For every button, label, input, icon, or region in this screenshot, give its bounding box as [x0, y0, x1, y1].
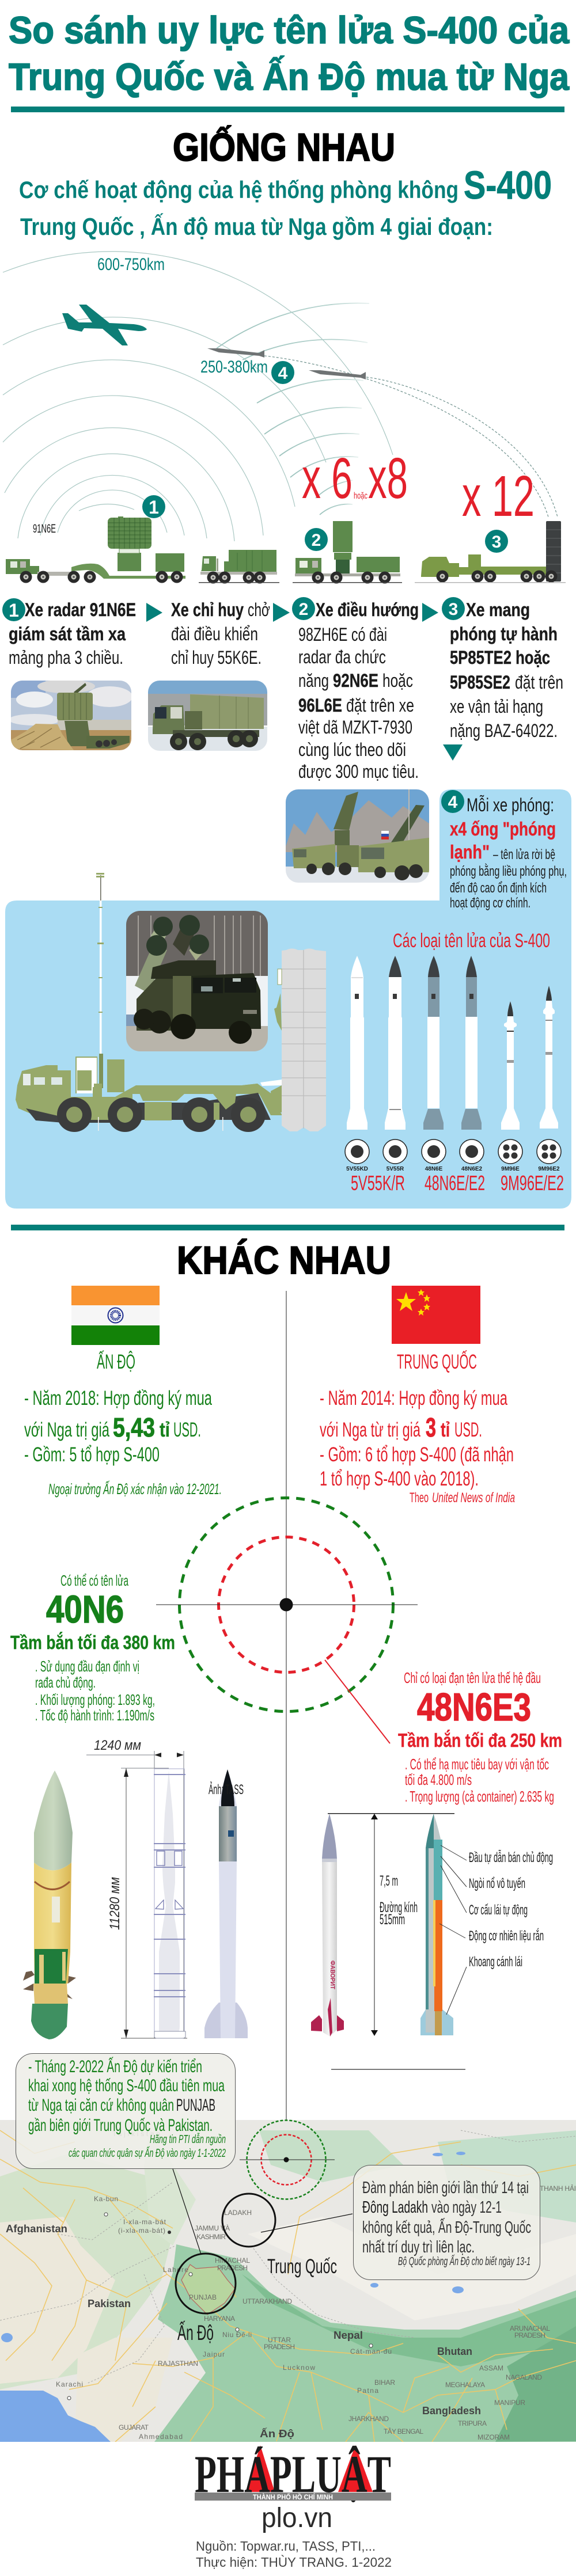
map: ARUNACHAL [510, 2324, 550, 2332]
arrow 1 [146, 603, 162, 622]
text block: India contract: tỉ [160, 1419, 170, 1441]
vehicle: guidance radar [293, 521, 402, 584]
cutaway labels: Khoang cánh lái [469, 1954, 522, 1970]
icon: missile 2 [309, 370, 366, 379]
photo: radar [9, 679, 132, 750]
flag: China [392, 1286, 480, 1344]
step 4 text: cold launch: 4 [448, 793, 458, 812]
map: Tajikistan [112, 2130, 160, 2138]
map: Bhutan [437, 2346, 472, 2357]
label: 7,5 m [380, 1873, 418, 1928]
callout: India deployment: - Tháng 2-2022 Ấn Độ dự kiến triển [28, 2057, 202, 2076]
missile height rule [328, 1813, 454, 2036]
step 4 text: launcher vehicle: xe vận tải hạng [450, 696, 543, 717]
missile cross-sections: 48N6E2 [461, 1166, 483, 1172]
map: Bangladesh [422, 2405, 481, 2417]
map: THANH HẢI [540, 2184, 576, 2193]
text block: India contract: 5,43 [113, 1412, 155, 1442]
step 3 text: guidance vehicle: radar đa chức [298, 647, 386, 667]
step 3 text: guidance vehicle: hoặc [382, 670, 413, 691]
missile: 9M96E [501, 1001, 520, 1130]
step 3 text: guidance vehicle: 2 [299, 600, 308, 619]
step 1 text: Xe radar 91N6E [25, 599, 136, 620]
step 2 text: command vehicle: Xe chỉ huy [171, 599, 244, 620]
map: PUNJAB [189, 2293, 217, 2301]
step 2 text: command vehicle: chở [248, 599, 270, 620]
icon: missile 1 [207, 348, 264, 358]
map: MEGHALAYA [445, 2381, 485, 2389]
step 3 text: guidance vehicle: 96L6E [298, 695, 342, 716]
map: JAMMU VÀ [195, 2224, 230, 2232]
text block: India contract: - Năm 2018: Hợp đồng ký mua [24, 1387, 212, 1409]
logo: Pháp Luật [195, 2445, 391, 2503]
step 3 text: guidance vehicle: đặt trên xe [346, 695, 414, 716]
badge 4: 4 [278, 364, 288, 383]
map: PRADESH [217, 2264, 248, 2272]
callout: India deployment: từ Nga tại căn cứ không quân [28, 2096, 174, 2115]
callout: border talks [354, 2165, 540, 2280]
missile cross-sections: 9M96E2 [538, 1166, 560, 1172]
photo: S-400 launcher truck [126, 911, 268, 1051]
caption: TASS: Ảnh: TASS [209, 1781, 244, 1798]
map: UTTARAKHAND [242, 2297, 292, 2305]
vehicle: command truck [199, 550, 279, 584]
dimension drawing: 1240 мм [94, 1738, 141, 1753]
missile group labels: 5V55K/R [351, 1171, 405, 1195]
badge 1 top [142, 495, 165, 518]
title [9, 9, 570, 98]
map: Lucknow [283, 2364, 315, 2372]
text block: India contract: Ngoại trưởng Ấn Độ xác nhận vào 12-2021. [48, 1480, 222, 1498]
text block: India contract: USD. [173, 1419, 201, 1441]
step 1 text: mảng pha 3 chiều. [9, 647, 123, 668]
text block: India contract [24, 1387, 222, 1498]
step 1 text [2, 598, 136, 668]
callout: border talks: Đông Ladakh [362, 2198, 428, 2217]
step 4 text: cold launch: lạnh" [450, 841, 490, 863]
map: RAJASTHAN [158, 2360, 198, 2368]
badge 1 top: 1 [149, 497, 159, 518]
map: TÂY BENGAL [384, 2427, 423, 2436]
step 2 text: command vehicle [171, 599, 270, 668]
missile: 40N6 photo [23, 1770, 76, 2039]
antenna mast [96, 873, 104, 1062]
missile: left render [311, 1814, 344, 2037]
callout: border talks: vào ngày 12-1 [431, 2198, 502, 2217]
step 1 text: giám sát tầm xa [9, 624, 126, 644]
subheading: mechanism: Cơ chế hoạt động của hệ thống phòng không [19, 176, 458, 203]
map: TRIPURA [458, 2419, 487, 2427]
badge 4 [271, 361, 294, 384]
map: Lahore [163, 2266, 188, 2274]
launcher truck illustration [16, 1054, 282, 1132]
map: Jaipur [203, 2350, 225, 2358]
step 4 text: launcher vehicle: Xe mang [466, 599, 530, 620]
callout: India deployment: các quan chức quân sự Ấn Độ vào ngày 1-1-2022 [69, 2146, 226, 2160]
step 4 text: launcher vehicle: 5P85TE2 hoặc [450, 647, 550, 668]
map: PRADESH [514, 2331, 545, 2339]
callout: India deployment: PUNJAB [176, 2096, 215, 2115]
map: PRADESH [264, 2343, 295, 2351]
missile cross-sections: 9M96E [501, 1166, 520, 1172]
missile: 9M96E2 [540, 986, 558, 1129]
dimension drawing: 11280 мм [107, 1877, 123, 1930]
text block: 40N6: . Tốc độ hành trình: 1.190m/s [35, 1707, 154, 1724]
badge 2 top: 2 [312, 531, 321, 550]
missile: cutaway [420, 1814, 453, 2035]
label: x 6 hoặc x8: hoặc [354, 491, 367, 501]
missile group labels: 48N6E/E2 [425, 1171, 485, 1195]
map: JHARKHAND [348, 2415, 389, 2423]
vehicle: radar 91N6E [6, 516, 185, 583]
radar arcs diagram [3, 252, 558, 541]
credits: Nguồn: Topwar.ru, TASS, PTI,... [196, 2539, 376, 2554]
logo url: plo.vn [262, 2503, 332, 2533]
heading: giống nhau: GIỐNG NHAU [173, 125, 395, 169]
text block: China contract: Theo [410, 1490, 429, 1506]
text block: 40N6: 40N6 [46, 1588, 124, 1631]
step 3 text: guidance vehicle: được 300 mục tiêu. [298, 761, 419, 782]
map: LADAKH [224, 2209, 252, 2217]
text block: 48N6E3: tối đa 4.800 m/s [405, 1771, 472, 1788]
map: Ahmedabad [139, 2433, 183, 2441]
missile cross-sections: 5V55R [386, 1166, 404, 1172]
text block: 48N6E3 [398, 1669, 562, 1805]
vehicle: launcher [415, 521, 566, 583]
photo: command truck [148, 681, 267, 751]
leader lines [439, 1845, 467, 2015]
map: GUJARAT [119, 2423, 149, 2431]
text block: 40N6: . Sử dụng đầu đạn định vị [35, 1658, 139, 1675]
arrow 3 [422, 603, 438, 622]
text block: 40N6: Có thể có tên lửa [60, 1572, 128, 1589]
step 2 text: command vehicle: đài điều khiển [171, 624, 258, 644]
label: x 6 hoặc x8: x 6 [302, 446, 353, 511]
map: I-xla-ma-bát [123, 2218, 166, 2226]
logo: Pháp Luật: THÀNH PHỐ HỒ CHÍ MINH [253, 2493, 333, 2501]
map: Ấn Độ [260, 2427, 294, 2440]
callout: India deployment [16, 2053, 235, 2168]
step 4 text: launcher vehicle [442, 597, 563, 741]
step 4 text: launcher vehicle: đặt trên [515, 672, 563, 693]
step 4 text: cold launch [441, 790, 567, 911]
text block: China contract: tỉ [441, 1419, 450, 1441]
step 3 text: guidance vehicle: Xe điều hướng [316, 599, 419, 620]
cutaway labels: Ngòi nổ vô tuyến [469, 1876, 525, 1891]
missile: 5V55K [347, 956, 367, 1130]
missile: 48N6E [423, 956, 444, 1130]
launch canister [274, 949, 326, 1131]
arrow 2 [273, 603, 290, 622]
callout: border talks: nhất trí duy trì liên lạc. [362, 2238, 475, 2256]
map: HIMACHAL [215, 2256, 250, 2265]
text block: 40N6 [10, 1572, 175, 1724]
label: x 12: x 12 [462, 464, 535, 529]
icon: plane [62, 305, 147, 345]
map: ASSAM [479, 2364, 503, 2372]
text block: China contract: với Nga từ trị giá [320, 1419, 420, 1441]
missile: 5V55R [385, 956, 406, 1130]
label: China: TRUNG QUỐC [397, 1350, 477, 1373]
map label: China: Trung Quốc [267, 2255, 337, 2278]
subheading: mechanism: Trung Quốc , Ấn độ mua từ Nga gồm 4 giai đoạn: [20, 213, 493, 240]
badge 2 top [305, 528, 328, 551]
badge 3 top [485, 530, 508, 553]
map: MIZORAM [478, 2433, 510, 2441]
map: Nepal [334, 2330, 363, 2341]
label: India: ẤN ĐỘ [97, 1350, 135, 1373]
step 3 text: guidance vehicle: năng [298, 670, 329, 691]
text block: China contract: 1 tổ hợp S-400 vào 2018). [320, 1468, 479, 1490]
step 3 text: guidance vehicle: 98ZH6E có đài [298, 624, 387, 645]
missile: TASS photo [204, 1769, 248, 2038]
step 1 text: 1 [9, 600, 19, 621]
credits: Thực hiện: THÙY TRANG. 1-2022 [196, 2555, 392, 2570]
step 3 text: guidance vehicle: 92N6E [333, 670, 378, 691]
map: Patna [357, 2387, 378, 2395]
map markers [173, 2169, 353, 2313]
map target circles [240, 2120, 335, 2199]
subheading: mechanism: S-400 [464, 163, 552, 207]
text block: China contract [320, 1387, 515, 1506]
map label: India: Ấn Độ [177, 2321, 214, 2345]
label: 7,5 m: 7,5 m [380, 1873, 398, 1889]
missile: 48N6E2 [461, 956, 482, 1130]
step 4 text: launcher vehicle: 3 [449, 600, 458, 619]
label: x 6 hoặc x8: x8 [368, 446, 408, 511]
logo: Pháp Luật: PHÁPLUẬT [195, 2445, 391, 2503]
range label: 600-750km: 600-750km [97, 255, 165, 274]
badge 3 top: 3 [492, 533, 501, 552]
subheading: mechanism [19, 163, 552, 240]
cutaway labels [469, 1850, 553, 1970]
map: (i-xla-ma-bát) [118, 2227, 165, 2235]
text block: India contract: với Nga trị giá [24, 1419, 109, 1441]
map: BIHAR [374, 2379, 395, 2387]
map: Cát-man-đu [350, 2347, 392, 2355]
credits [196, 2539, 392, 2570]
heading: khác nhau: KHÁC NHAU [177, 1238, 391, 1282]
label: 7,5 m: 515mm [380, 1912, 405, 1928]
missile group labels [351, 1171, 564, 1195]
map: Afghanistan [6, 2223, 67, 2235]
callout: India deployment: khai xong hệ thống S-400 đầu tiên mua [28, 2076, 225, 2095]
text block: China contract: United News of India [432, 1490, 515, 1506]
text block: 40N6: Tầm bắn tối đa 380 km [10, 1632, 175, 1653]
map: KASHMIR [196, 2233, 226, 2241]
missile cross-sections: 48N6E [425, 1166, 443, 1172]
text: Đường kính [380, 1899, 418, 1916]
label: 91N6E: 91N6E [33, 522, 56, 535]
text block: 40N6: . Khối lượng phóng: 1.893 kg, [35, 1691, 155, 1708]
missile cross-sections [345, 1139, 561, 1172]
step 3 text: guidance vehicle: cùng lúc theo dõi [298, 739, 406, 760]
map: HARYANA [204, 2315, 235, 2323]
map: Pakistan [88, 2298, 131, 2309]
text block: India contract: - Gồm: 5 tổ hợp S-400 [24, 1443, 160, 1466]
leader line: red range [325, 1660, 390, 1743]
step 3 text: guidance vehicle: việt dã MZKT-7930 [298, 717, 412, 738]
photo: guidance trucks [286, 789, 429, 883]
text block: 48N6E3: 48N6E3 [417, 1685, 531, 1729]
callout: India deployment: gần biên giới Trung Quốc và Pakistan. [28, 2116, 213, 2135]
step 3 text: guidance vehicle [292, 597, 419, 782]
map: NAGALAND [506, 2373, 542, 2381]
missile: left render: ФАВОРИТ [329, 1961, 336, 1989]
flag: India [71, 1286, 160, 1345]
map: UTTAR [268, 2336, 291, 2344]
panel: blue background [5, 789, 571, 1209]
map: Niu Đê-li [222, 2331, 252, 2339]
center divider and range target [156, 1291, 418, 2201]
map: Ka-bun [94, 2195, 118, 2203]
callout: India deployment: Hãng tin PTI dẫn nguồn [150, 2133, 226, 2146]
dimension drawing [86, 1738, 187, 2038]
map [0, 2120, 576, 2442]
step 2 text: command vehicle: chỉ huy 55K6E. [171, 647, 262, 668]
arrow down [443, 744, 463, 761]
step 4 text: cold launch: hoạt động cơ chính. [450, 895, 530, 911]
text block: 40N6: rađa chủ động. [35, 1674, 96, 1691]
text block: China contract: 3 [426, 1412, 436, 1442]
range label: 250-380km: 250-380km [200, 358, 268, 377]
map: MANIPUR [494, 2399, 525, 2407]
missile cross-sections: 5V55KD [346, 1166, 368, 1172]
text block: China contract: USD. [454, 1419, 482, 1441]
map: Karachi [56, 2380, 83, 2388]
step 4 text: launcher vehicle: 5P85SE2 [450, 672, 510, 693]
